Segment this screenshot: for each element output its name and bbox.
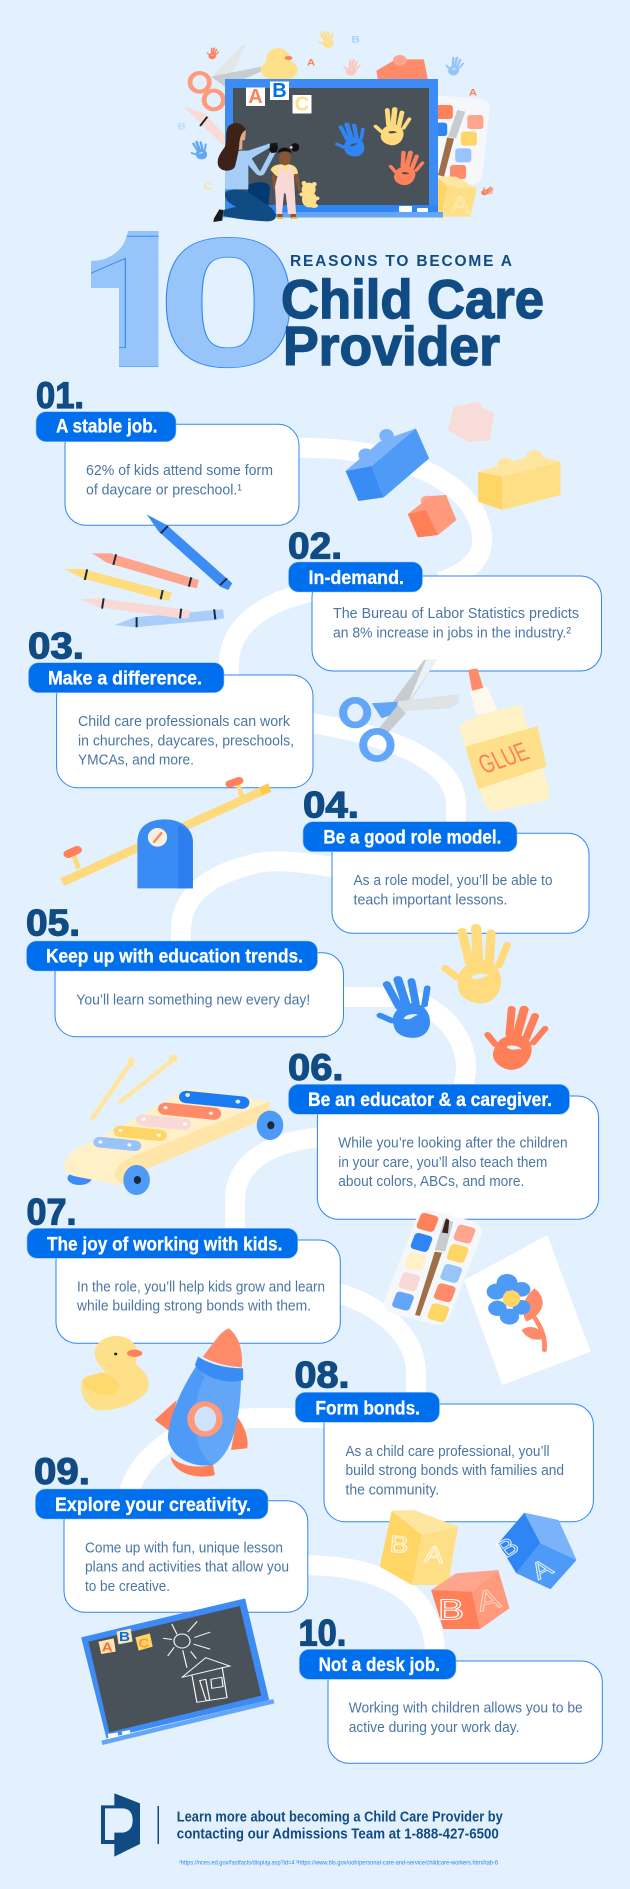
text 01 — [86, 462, 273, 498]
letter cards — [98, 1629, 153, 1654]
panel: reason 01 — [36, 375, 299, 525]
icon: logo — [101, 1793, 140, 1857]
panel: reason 04 — [303, 785, 589, 933]
illustrations group C — [81, 1207, 591, 1589]
text 08 — [346, 1443, 564, 1498]
text 09: plans and activities that allow you — [85, 1559, 289, 1576]
icon: orange handprint — [478, 1003, 550, 1075]
panel: reason 05 — [26, 902, 344, 1037]
icon: chalkboard — [223, 79, 443, 218]
icon: yellow lego brick — [478, 450, 561, 510]
number 06: 06. — [288, 1047, 344, 1088]
icon: yellow handprint — [445, 928, 507, 1003]
panel: reason 07 — [26, 1191, 340, 1343]
panel: reason 06 — [288, 1047, 599, 1219]
chalk — [108, 1730, 131, 1739]
letter cards: B — [119, 1629, 130, 1644]
title — [281, 253, 544, 377]
chalk pieces — [399, 206, 428, 212]
text 06 — [338, 1135, 568, 1190]
icon: orange alphabet block: A — [472, 1582, 504, 1618]
heading 10: Not a desk job. — [319, 1655, 440, 1676]
text 02: an 8% increase in jobs in the industry.² — [333, 624, 571, 641]
icon: pink crayon — [183, 106, 229, 147]
icon: handprints on board — [333, 107, 425, 188]
heading 05: Keep up with education trends. — [46, 947, 303, 968]
icon: blue lego brick — [346, 428, 429, 501]
heading 08: Form bonds. — [315, 1398, 420, 1419]
footer call to action — [177, 1810, 503, 1842]
text 07 — [76, 1279, 325, 1315]
icon: yellow block: A — [451, 193, 470, 218]
teacher: shirt and arms — [225, 143, 277, 189]
kicker: REASONS TO BECOME A — [290, 253, 512, 270]
icon: xylophone — [64, 1055, 283, 1195]
text 02 — [333, 605, 579, 641]
block letters: A — [423, 1542, 446, 1568]
text 05: You’ll learn something new every day! — [76, 992, 310, 1009]
letter cards: C — [138, 1636, 149, 1650]
icon: rubber duck — [261, 48, 298, 81]
text 06: in your care, you’ll also teach them — [338, 1154, 547, 1171]
block letters — [388, 1532, 559, 1585]
text 03: YMCAs, and more. — [78, 752, 194, 769]
text 10 — [349, 1700, 583, 1736]
heading 03: Make a difference. — [48, 668, 202, 689]
heading 01: A stable job. — [56, 417, 158, 438]
footer call to action: contacting our Admissions Team at 1-888-427-6500 — [177, 1826, 499, 1842]
icon: yellow block — [438, 177, 477, 218]
text 06: While you’re looking after the children — [338, 1135, 568, 1152]
headline — [281, 268, 544, 377]
icon: orange block — [376, 55, 428, 80]
text 03: in churches, daycares, preschools, — [78, 732, 294, 749]
panel: reason 09 — [34, 1451, 308, 1612]
headline: Child Care — [281, 268, 544, 330]
heading 04: Be a good role model. — [323, 827, 501, 848]
teacher: pants — [213, 182, 276, 222]
footer call to action: Learn more about becoming a Child Care Provider by — [177, 1810, 503, 1826]
heading 06: Be an educator & a caregiver. — [308, 1090, 552, 1111]
text 02: The Bureau of Labor Statistics predicts — [333, 605, 579, 622]
text 09: to be creative. — [85, 1578, 170, 1595]
text 01: of daycare or preschool.¹ — [86, 481, 242, 498]
floating letters: B — [352, 35, 360, 45]
icon: watercolor palette — [380, 1207, 486, 1328]
chalk drawing: sun and house — [164, 1622, 230, 1702]
panel: reason 02 — [288, 525, 602, 671]
icon: seesaw — [60, 781, 271, 888]
icon: tilted chalkboard drawing — [81, 1598, 274, 1745]
icon: orange lego brick — [408, 495, 456, 537]
hero illustration: teacher and child at chalkboard — [178, 30, 495, 222]
big numeral 10: 1 — [61, 196, 214, 408]
number 08: 08. — [294, 1354, 350, 1395]
number 05: 05. — [26, 902, 80, 943]
heading 09: Explore your creativity. — [55, 1495, 251, 1516]
number 01: 01. — [36, 375, 84, 416]
floating letters: A — [307, 58, 316, 68]
letter cards on board — [246, 80, 312, 116]
number 03: 03. — [28, 625, 84, 666]
block letters: B — [492, 1533, 525, 1563]
illustrations group A — [64, 402, 561, 812]
text 03 — [78, 713, 294, 769]
glue label: GLUE — [474, 737, 534, 780]
letter cards on board: A — [248, 86, 263, 108]
text 08: the community. — [346, 1481, 439, 1498]
icon: glue bottle — [459, 668, 550, 812]
icon: blue handprint — [372, 975, 439, 1043]
heading 02: In-demand. — [308, 568, 404, 589]
icon: blue alphabet block — [498, 1513, 577, 1589]
floating letters — [178, 35, 484, 192]
icon: scissors — [190, 45, 261, 109]
number 07: 07. — [26, 1191, 76, 1232]
footnotes: ¹https://nces.ed.gov/fastfacts/display.asp?id=4 ²https://www.bls.gov/ooh/personal-care-and-service/childcare-workers.htm#tab-6 — [179, 1860, 499, 1866]
text 04 — [354, 872, 552, 908]
letter cards on board: B — [272, 80, 287, 102]
child — [270, 143, 301, 219]
big numeral 10: 0 — [156, 199, 301, 405]
floating letters: C — [475, 170, 484, 180]
text 04: As a role model, you’ll be able to — [354, 872, 552, 889]
floating letters: B — [178, 122, 186, 132]
number 04: 04. — [303, 785, 359, 826]
text 06: about colors, ABCs, and more. — [338, 1173, 524, 1190]
text 09: Come up with fun, unique lesson — [85, 1540, 283, 1557]
text 09 — [85, 1540, 289, 1595]
headline: Provider — [283, 315, 500, 377]
text 10: Working with children allows you to be — [349, 1700, 583, 1717]
text 08: As a child care professional, you’ll — [346, 1443, 550, 1460]
icon: orange alphabet block — [431, 1570, 509, 1629]
icon: blue-handled scissors — [343, 659, 459, 759]
icon: rubber duck — [81, 1336, 149, 1410]
icon: teddy bear — [299, 181, 320, 208]
heading 07: The joy of working with kids. — [47, 1235, 282, 1256]
icon: header props behind the board — [178, 30, 495, 218]
text 04: teach important lessons. — [354, 891, 508, 908]
icon: yellow alphabet block — [380, 1510, 458, 1585]
text 01: 62% of kids attend some form — [86, 462, 273, 479]
icon: crayons — [64, 514, 232, 627]
illustrations group D — [81, 1532, 559, 1745]
text 08: build strong bonds with families and — [346, 1462, 564, 1479]
number 09: 09. — [34, 1451, 90, 1492]
block letters: B — [388, 1532, 410, 1558]
panel: reason 08 — [294, 1354, 593, 1522]
icon: rocket — [155, 1328, 248, 1477]
floating letters: C — [204, 182, 212, 192]
letter cards on board: C — [295, 94, 309, 116]
icon: flower drawing on paper — [464, 1235, 591, 1385]
icon: pink lego brick — [448, 402, 494, 442]
text 07: In the role, you’ll help kids grow and learn — [77, 1279, 325, 1296]
panel: reason 10 — [298, 1612, 602, 1763]
block letters: A — [526, 1555, 559, 1585]
panel: reason 03 — [28, 625, 313, 788]
text 10: active during your work day. — [349, 1719, 520, 1736]
icon: small handprints — [189, 30, 495, 197]
text 03: Child care professionals can work — [78, 713, 290, 730]
number 10: 10. — [298, 1612, 346, 1653]
illustrations group B — [60, 781, 550, 1195]
icon: watercolor palette — [413, 94, 491, 186]
text 07: while building strong bonds with them. — [76, 1298, 311, 1315]
big numeral 10 — [91, 231, 290, 368]
winding white path — [128, 448, 482, 1655]
teacher: head and hair — [218, 123, 278, 171]
floating letters: A — [469, 88, 478, 98]
letter cards: A — [102, 1640, 113, 1654]
icon: orange alphabet block: B — [438, 1594, 464, 1626]
icon: teacher and child — [213, 123, 320, 222]
footer divider — [158, 1806, 159, 1844]
number 02: 02. — [288, 525, 342, 566]
